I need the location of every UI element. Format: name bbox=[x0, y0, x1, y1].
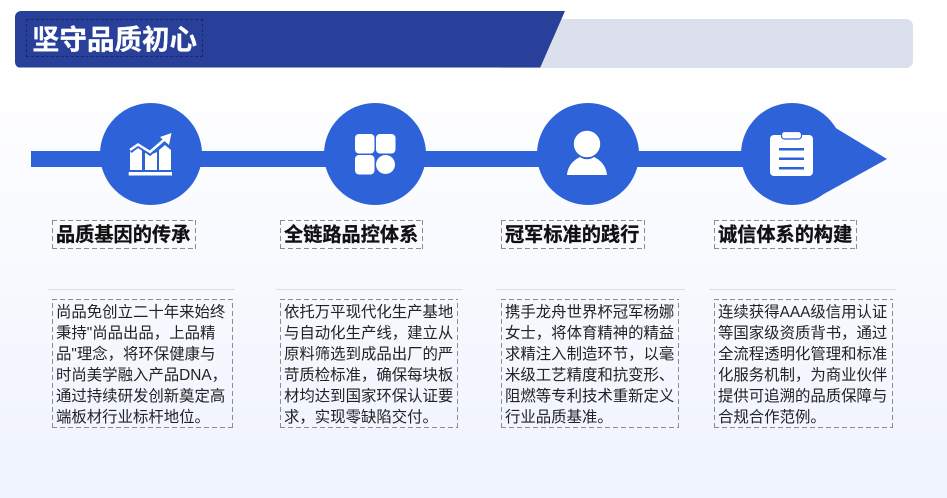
header dark banner bbox=[15, 11, 565, 68]
body text 4 bbox=[714, 299, 893, 428]
body text 4: 等国家级资质背书，通过 bbox=[718, 325, 887, 342]
body text 2: 苛质检标准，确保每块板 bbox=[284, 367, 453, 384]
node 1: chart icon bbox=[100, 103, 202, 205]
body text 3: 米级工艺精度和抗变形、 bbox=[505, 367, 674, 384]
body text 4: 合规合作范例。 bbox=[718, 409, 826, 426]
body text 2: 材均达到国家环保认证要 bbox=[284, 388, 453, 405]
body text 2: 求，实现零缺陷交付。 bbox=[284, 409, 438, 426]
body text 1: 通过持续研发创新奠定高 bbox=[56, 388, 225, 405]
header band bbox=[15, 11, 913, 68]
body text 4: 化服务机制，为商业伙伴 bbox=[718, 367, 887, 384]
body text 1: 时尚美学融入产品DNA， bbox=[56, 367, 227, 384]
heading 3 bbox=[501, 220, 645, 249]
body text 3: 阻燃等专利技术重新定义 bbox=[505, 388, 674, 405]
body text 4: 提供可追溯的品质保障与 bbox=[718, 388, 887, 405]
body text 1: 秉持"尚品出品，上品精 bbox=[56, 325, 215, 342]
body text 2: 与自动化生产线，建立从 bbox=[284, 325, 453, 342]
heading 1: 品质基因的传承 bbox=[56, 225, 190, 246]
body text 3: 行业品质基准。 bbox=[505, 409, 613, 426]
node 2: apps icon bbox=[324, 103, 426, 205]
node 4: clipboard icon bbox=[741, 103, 843, 205]
body text 4: 全流程透明化管理和标准 bbox=[718, 346, 887, 363]
body text 3 bbox=[501, 299, 679, 428]
heading 4 bbox=[714, 220, 857, 249]
body text 3: 求精注入制造环节，以毫 bbox=[505, 346, 674, 363]
body text 3: 携手龙舟世界杯冠军杨娜 bbox=[505, 304, 674, 321]
heading 1 bbox=[52, 220, 196, 249]
node 3: person icon bbox=[537, 103, 639, 205]
timeline bar bbox=[31, 151, 831, 167]
title: 坚守品质初心 bbox=[32, 24, 197, 55]
heading 2 bbox=[280, 220, 423, 249]
body text 1: 尚品免创立二十年来始终 bbox=[56, 304, 225, 321]
heading 2: 全链路品控体系 bbox=[284, 225, 418, 246]
timeline with icons bbox=[31, 103, 887, 205]
arrow head bbox=[822, 127, 887, 195]
body text 4: 连续获得AAA级信用认证 bbox=[718, 304, 887, 321]
heading 4: 诚信体系的构建 bbox=[718, 225, 852, 246]
body text 1 bbox=[52, 299, 233, 428]
heading 3: 冠军标准的践行 bbox=[505, 225, 639, 246]
body text 2: 原料筛选到成品出厂的严 bbox=[284, 346, 453, 363]
body text 3: 女士，将体育精神的精益 bbox=[505, 325, 674, 342]
body text 2: 依托万平现代化生产基地 bbox=[284, 304, 453, 321]
body text 1: 品"理念，将环保健康与 bbox=[56, 346, 215, 363]
body text 1: 端板材行业标杆地位。 bbox=[56, 409, 210, 426]
header background bar bbox=[500, 19, 913, 68]
body text 2 bbox=[280, 299, 458, 428]
